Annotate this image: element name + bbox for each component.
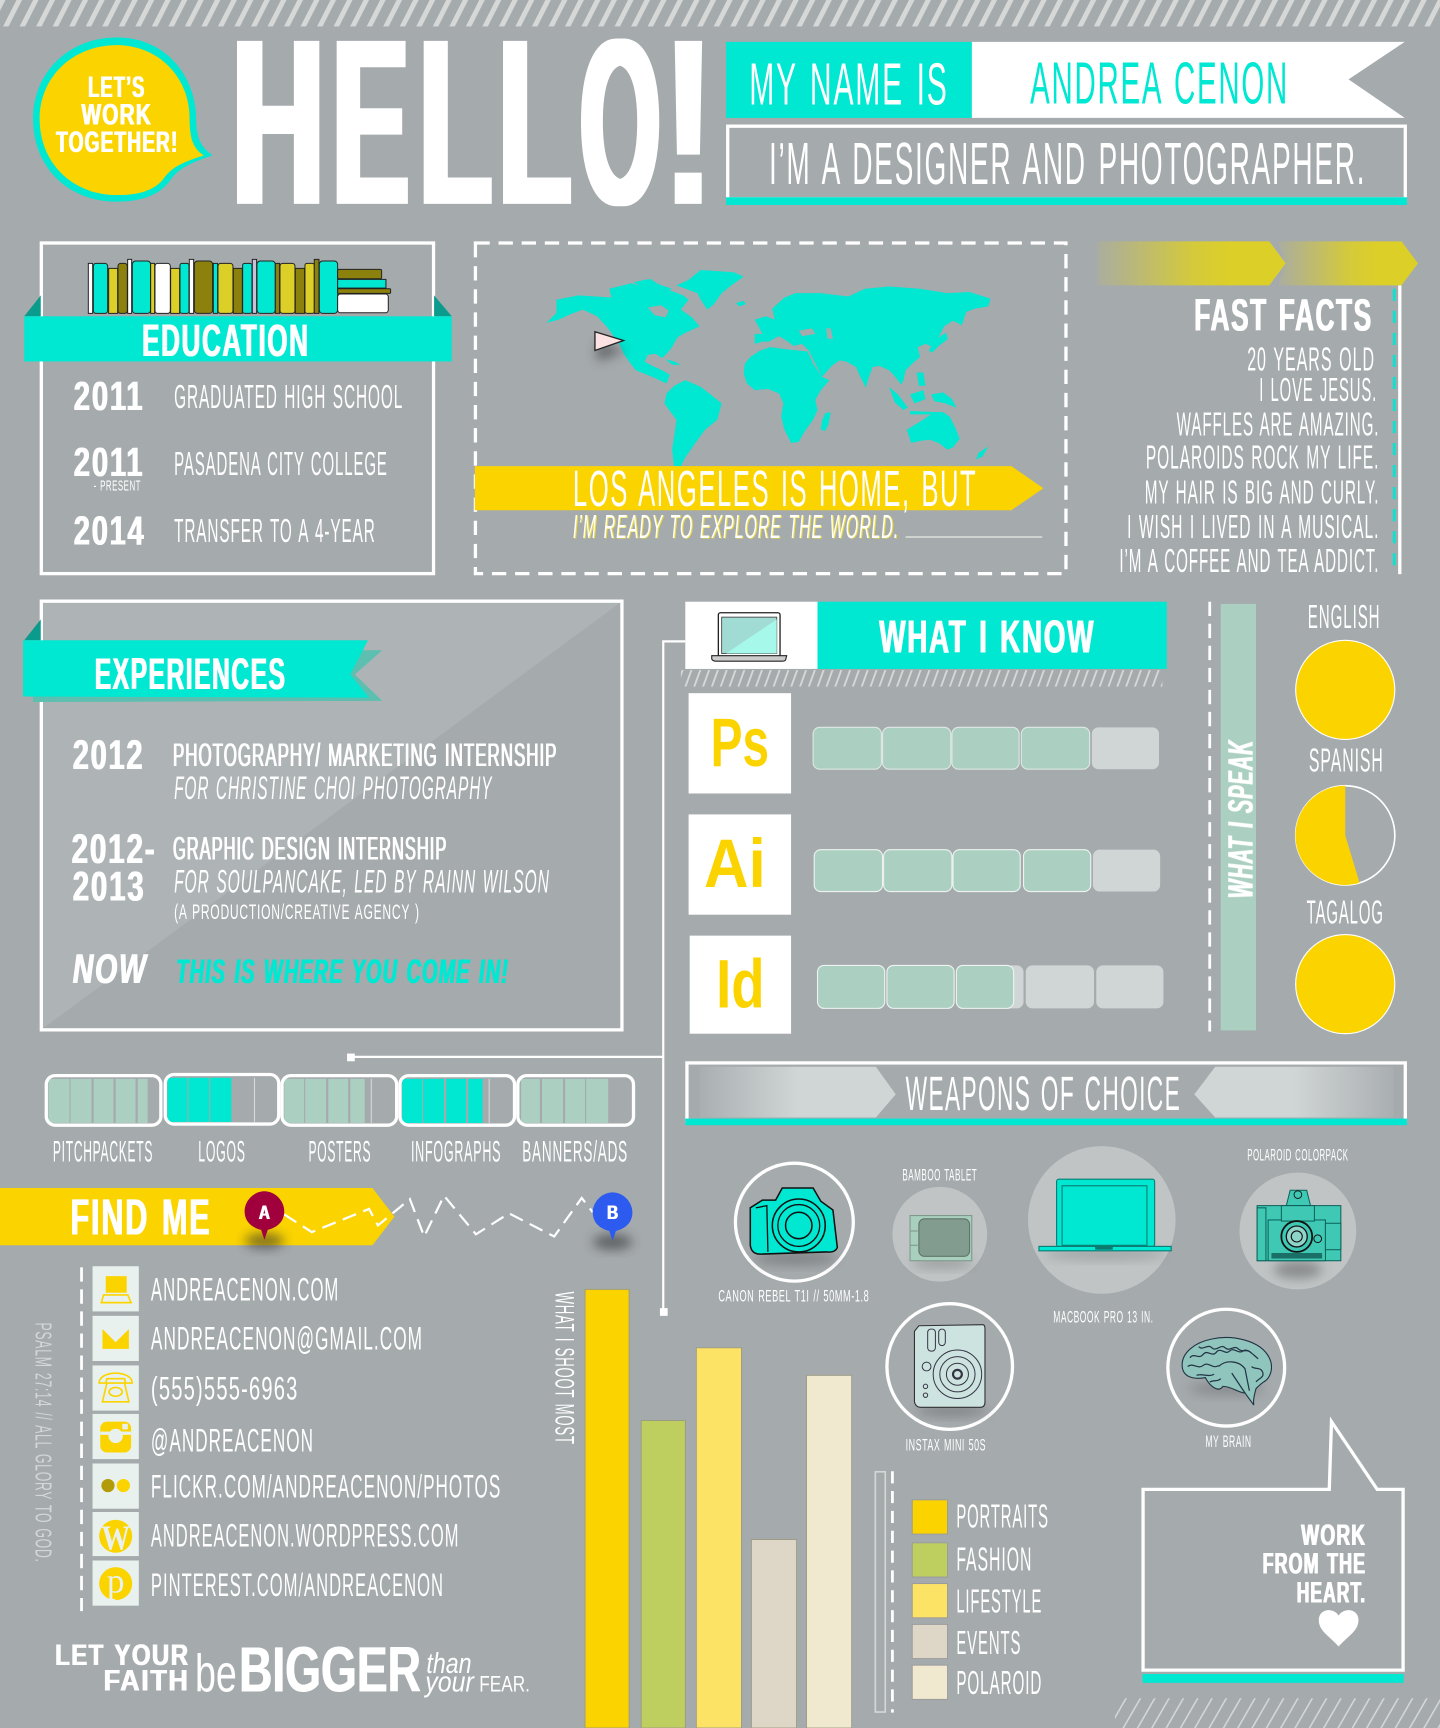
bottom stripes bbox=[1115, 1698, 1440, 1728]
panel: what i speak bbox=[1210, 599, 1395, 1034]
education entries: 2014 bbox=[74, 507, 145, 553]
side rules bbox=[1394, 285, 1401, 574]
pin B bbox=[593, 1192, 632, 1250]
panel: fast facts bbox=[1097, 241, 1418, 580]
contact: flickr: FLICKR.COM/ANDREACENON/PHOTOS bbox=[151, 1469, 501, 1505]
tagline: let your faith be bigger bbox=[55, 1634, 530, 1706]
contact list bbox=[82, 1266, 501, 1611]
education entries bbox=[74, 373, 403, 553]
icon: computer bbox=[93, 1266, 139, 1311]
tagline: let your faith be bigger: than bbox=[426, 1648, 472, 1680]
pointer bbox=[595, 332, 626, 361]
icon: phone bbox=[93, 1365, 139, 1411]
chart legend: EVENTS bbox=[956, 1625, 1021, 1662]
experience entries: 2012 bbox=[73, 731, 144, 778]
contact: phone: (555)555-6963 bbox=[151, 1371, 299, 1407]
speech box: work from the heart: WORK bbox=[1301, 1519, 1366, 1552]
header: weapons of choice bbox=[685, 1063, 1407, 1125]
icon: wordpress: W bbox=[101, 1518, 130, 1557]
bar labels: PITCHPACKETS bbox=[53, 1136, 153, 1169]
bar: infographs bbox=[400, 1076, 515, 1125]
education entries: - PRESENT bbox=[94, 478, 141, 494]
arrows bbox=[1097, 241, 1418, 285]
weapon: canon camera bbox=[718, 1163, 869, 1306]
panel: experiences: FOR SOULPANCAKE, LED BY RAINN WILSON bbox=[174, 864, 550, 900]
ribbon: experiences: EXPERIENCES bbox=[95, 650, 286, 699]
text: PORTRAITS bbox=[956, 1498, 1049, 1535]
name banner bbox=[726, 42, 1405, 118]
weapon: instax camera bbox=[887, 1304, 1013, 1454]
experience entries: THIS IS WHERE YOU COME IN! bbox=[176, 953, 509, 991]
list of facts bbox=[1119, 341, 1379, 580]
bar: pitchpackets bbox=[46, 1076, 161, 1125]
experience entries: 2012- bbox=[72, 825, 156, 872]
top stripes bbox=[0, 0, 1440, 26]
connector lines bbox=[347, 641, 685, 1316]
speech bubble: let's work together: WORK bbox=[82, 99, 152, 132]
panel: education: GRADUATED HIGH SCHOOL bbox=[174, 379, 403, 416]
contact: wordpress: ANDREACENON.WORDPRESS.COM bbox=[151, 1518, 459, 1554]
icon: wordpress bbox=[93, 1512, 139, 1557]
pin A bbox=[245, 1191, 284, 1249]
title: HELLO! bbox=[232, 0, 712, 255]
name banner: MY NAME IS bbox=[749, 51, 949, 118]
tagline: let your faith be bigger: FEAR. bbox=[479, 1672, 530, 1697]
header: what i know: WHAT I KNOW bbox=[879, 610, 1095, 662]
pin B: B bbox=[607, 1202, 618, 1224]
weapon: brain bbox=[1168, 1309, 1285, 1451]
panel: map bbox=[475, 243, 1066, 574]
education entries: TRANSFER TO A 4-YEAR bbox=[174, 513, 376, 550]
weapon: canon camera: CANON REBEL T1I // 50MM-1.8 bbox=[718, 1287, 869, 1306]
banner: los angeles bbox=[475, 460, 1043, 517]
banner: find me bbox=[0, 1188, 394, 1245]
contact: website: ANDREACENON.COM bbox=[151, 1271, 339, 1307]
experience entries: NOW bbox=[73, 945, 148, 992]
language: spanish bbox=[1295, 742, 1395, 885]
bar: banners bbox=[518, 1076, 634, 1125]
subtitle: ready to explore: I’M READY TO EXPLORE THE WORLD. bbox=[574, 510, 900, 547]
weapon: bamboo tablet bbox=[892, 1165, 987, 1282]
panel: education bbox=[24, 243, 452, 574]
education entries: 2011 bbox=[74, 439, 144, 485]
icon: books bbox=[88, 259, 391, 313]
experience entries: (A PRODUCTION/CREATIVE AGENCY ) bbox=[174, 901, 420, 924]
weapon: instax camera: INSTAX MINI 50S bbox=[906, 1435, 986, 1454]
bar: logos bbox=[165, 1074, 279, 1124]
skill: illustrator: Ai bbox=[704, 826, 766, 902]
subtitle: ready to explore bbox=[573, 509, 1042, 547]
speech bubble: let's work together: LET’S bbox=[88, 71, 145, 104]
map inland seas bbox=[648, 305, 833, 339]
skill: indesign: Id bbox=[716, 946, 765, 1022]
weapon: brain: MY BRAIN bbox=[1205, 1432, 1252, 1451]
world map bbox=[546, 270, 990, 472]
header: what i know bbox=[681, 602, 1167, 687]
icon: laptop bbox=[712, 613, 787, 661]
chart legend bbox=[875, 1471, 1049, 1713]
speech box: work from the heart bbox=[1143, 1422, 1404, 1683]
icon: pinterest: p bbox=[107, 1561, 124, 1600]
tagline: let your faith be bigger: FAITH bbox=[104, 1665, 190, 1698]
subtitle: ready to explore: I’M READY TO EXPLORE THE WORLD. bbox=[573, 509, 899, 546]
bar chart: what i shoot most bbox=[585, 1289, 852, 1728]
contact: instagram: @ANDREACENON bbox=[151, 1422, 314, 1458]
pin A: A bbox=[259, 1202, 270, 1224]
experience entries: FOR CHRISTINE CHOI PHOTOGRAPHY bbox=[174, 770, 493, 806]
experience entries bbox=[72, 731, 557, 992]
text: POLAROID bbox=[956, 1665, 1042, 1702]
bar labels: INFOGRAPHS bbox=[411, 1136, 501, 1169]
bar labels: LOGOS bbox=[198, 1136, 246, 1169]
language: english bbox=[1296, 599, 1395, 739]
speech bubble: let's work together: TOGETHER! bbox=[56, 126, 178, 159]
bar labels: POSTERS bbox=[308, 1136, 371, 1169]
weapon: macbook bbox=[1028, 1146, 1176, 1326]
text: LIFESTYLE bbox=[956, 1583, 1042, 1620]
tagline: let your faith be bigger: be bbox=[195, 1645, 237, 1704]
text: BANNERS/ADS bbox=[522, 1136, 628, 1169]
weapon: polaroid colorpack bbox=[1239, 1145, 1356, 1289]
speech box: work from the heart: HEART. bbox=[1297, 1576, 1366, 1609]
dashed route bbox=[284, 1196, 593, 1236]
progress bars: design types bbox=[46, 1074, 634, 1169]
label: what i speak: WHAT I SPEAK bbox=[1222, 739, 1261, 898]
contact: pinterest: PINTEREST.COM/ANDREACENON bbox=[151, 1567, 444, 1603]
skill: photoshop bbox=[689, 693, 1159, 793]
speech bubble: let's work together bbox=[33, 37, 213, 202]
bar labels bbox=[53, 1136, 628, 1169]
speech box: work from the heart: FROM THE bbox=[1263, 1548, 1366, 1581]
text: WHAT I SHOOT MOST bbox=[549, 1292, 579, 1445]
tagline: let your faith be bigger: your bbox=[424, 1667, 475, 1699]
language: tagalog bbox=[1296, 895, 1395, 1034]
ribbon: experiences bbox=[23, 619, 382, 702]
experience entries: 2013 bbox=[73, 862, 145, 909]
banner: los angeles: LOS ANGELES IS HOME, BUT bbox=[573, 460, 977, 517]
education entries: 2011 bbox=[74, 373, 144, 419]
icon: pinterest bbox=[93, 1560, 139, 1606]
contact: email: ANDREACENON@GMAIL.COM bbox=[151, 1320, 423, 1356]
experience entries: GRAPHIC DESIGN INTERNSHIP bbox=[173, 831, 447, 867]
weapon: bamboo tablet: BAMBOO TABLET bbox=[902, 1165, 977, 1184]
ribbon: education bbox=[24, 295, 452, 366]
icon: instagram bbox=[93, 1414, 139, 1459]
panel: experiences bbox=[23, 601, 622, 1030]
tagline: let your faith be bigger: BIGGER bbox=[239, 1634, 421, 1706]
chart legend: FASHION bbox=[956, 1541, 1032, 1578]
banner: find me: FIND ME bbox=[71, 1188, 212, 1245]
weapon: macbook: MACBOOK PRO 13 IN. bbox=[1053, 1307, 1154, 1326]
icon: mail bbox=[93, 1316, 139, 1361]
ribbon: education: EDUCATION bbox=[142, 315, 310, 366]
panel: what i know bbox=[681, 602, 1167, 1034]
skill: photoshop: Ps bbox=[711, 705, 769, 781]
panel: education: PASADENA CITY COLLEGE bbox=[174, 446, 388, 483]
bar: posters bbox=[282, 1076, 397, 1125]
experience entries: PHOTOGRAPHY/ MARKETING INTERNSHIP bbox=[173, 737, 557, 773]
tagline: let your faith be bigger: LET YOUR bbox=[55, 1639, 190, 1672]
icon: flickr bbox=[93, 1464, 139, 1509]
skill: indesign bbox=[690, 936, 1163, 1034]
icon: heart bbox=[1319, 1610, 1358, 1646]
skill: illustrator bbox=[689, 814, 1160, 915]
